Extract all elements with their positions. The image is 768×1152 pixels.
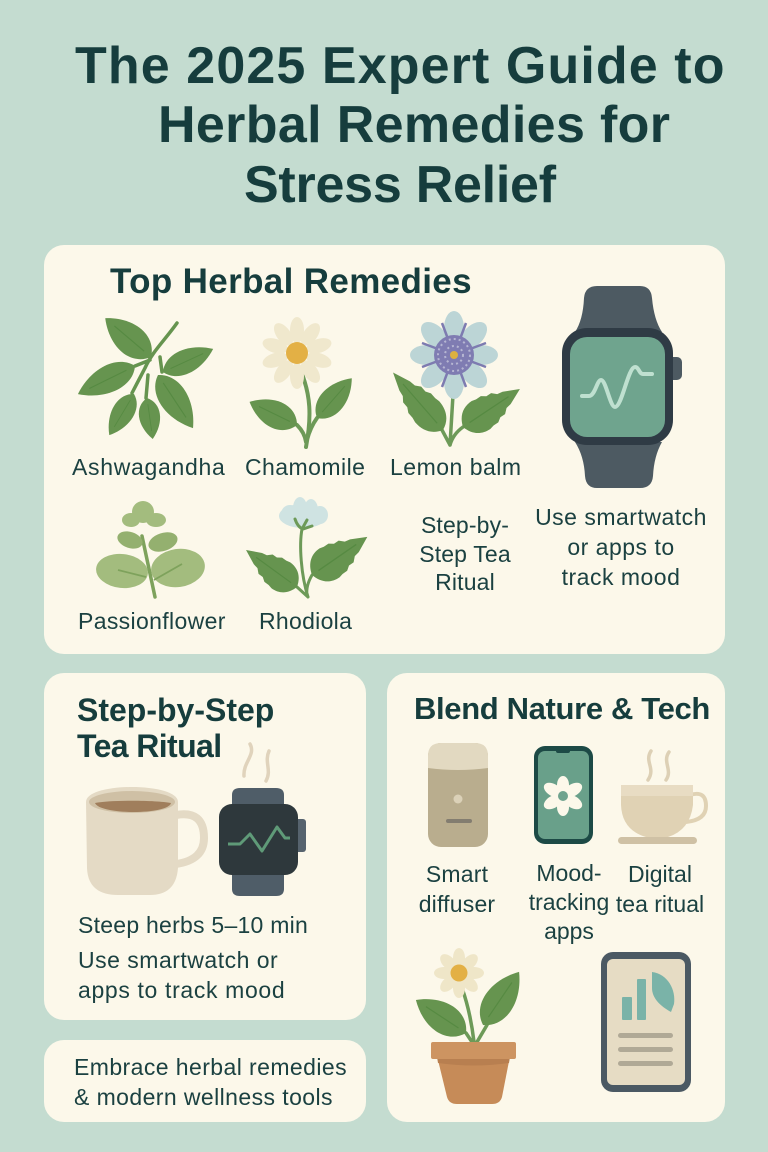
text: embrace herbal remedies: Embrace herbal remedies [74, 1054, 347, 1080]
icon: smart diffuser [428, 743, 488, 847]
icon: lemon balm [381, 311, 529, 445]
icon: mood-tracking phone [534, 746, 593, 844]
label: smart diffuser: diffuser [419, 891, 495, 917]
icon: digital tea cup [618, 751, 706, 844]
text: step-by-step tea ritual [419, 512, 511, 595]
heading: step-by-step tea ritual: Tea Ritual [77, 728, 222, 764]
heading: step-by-step tea ritual: Step-by-Step [77, 692, 274, 728]
icon: tablet with chart [601, 952, 691, 1092]
label: Ashwagandha: Ashwagandha [72, 454, 225, 480]
label: smart diffuser: Smart [426, 861, 488, 887]
icon: passionflower [94, 501, 207, 597]
icon: potted plant [408, 948, 531, 1104]
icon: rhodiola [237, 497, 377, 600]
panel: tea ritual [44, 673, 366, 1020]
icon: dark smartwatch [219, 788, 306, 896]
text: use smartwatch or apps: apps to track mood [78, 977, 285, 1003]
title [75, 37, 726, 214]
text: use smartwatch: Use smartwatch [535, 504, 707, 530]
panel: top herbal remedies [44, 245, 725, 654]
text: use smartwatch: track mood [562, 564, 680, 590]
text: use smartwatch or apps: Use smartwatch or [78, 947, 278, 973]
heading: top herbal remedies: Top Herbal Remedies [110, 262, 472, 301]
title: The 2025 Expert Guide to [75, 37, 726, 95]
text: use smartwatch [535, 504, 707, 590]
icon: chamomile [244, 317, 361, 447]
text: steep herbs: Steep herbs 5–10 min [78, 912, 308, 938]
heading: blend nature and tech: Blend Nature & Tech [414, 691, 710, 726]
label: digital tea ritual [616, 861, 704, 917]
label: Passionflower: Passionflower [78, 608, 226, 634]
label: digital tea ritual: Digital [628, 861, 692, 887]
icon: large smartwatch [562, 286, 682, 488]
text: step-by-step tea ritual: Ritual [435, 569, 495, 595]
heading: step-by-step tea ritual [77, 692, 274, 764]
icon: ashwagandha [72, 307, 218, 441]
label: mood-tracking apps: Mood- [536, 860, 602, 886]
text: use smartwatch or apps [78, 947, 285, 1003]
icon: steam [244, 744, 269, 781]
label: digital tea ritual: tea ritual [616, 891, 704, 917]
label: Rhodiola: Rhodiola [259, 608, 352, 634]
panel: blend nature and tech [387, 673, 725, 1122]
text: embrace herbal remedies: & modern wellness tools [74, 1084, 333, 1110]
text: embrace herbal remedies [74, 1054, 347, 1110]
icon: mug [86, 787, 204, 895]
title: Herbal Remedies for [158, 96, 670, 154]
text: step-by-step tea ritual: Step-by- [421, 512, 509, 538]
label: mood-tracking apps: apps [544, 918, 594, 944]
label: mood-tracking apps [529, 860, 609, 944]
label: smart diffuser [419, 861, 495, 917]
text: use smartwatch: or apps to [567, 534, 675, 560]
label: Lemon balm: Lemon balm [390, 454, 522, 480]
title: Stress Relief [244, 156, 556, 214]
label: Chamomile: Chamomile [245, 454, 365, 480]
label: mood-tracking apps: tracking [529, 889, 609, 915]
text: step-by-step tea ritual: Step Tea [419, 540, 511, 566]
panel: closing message [44, 1040, 366, 1122]
